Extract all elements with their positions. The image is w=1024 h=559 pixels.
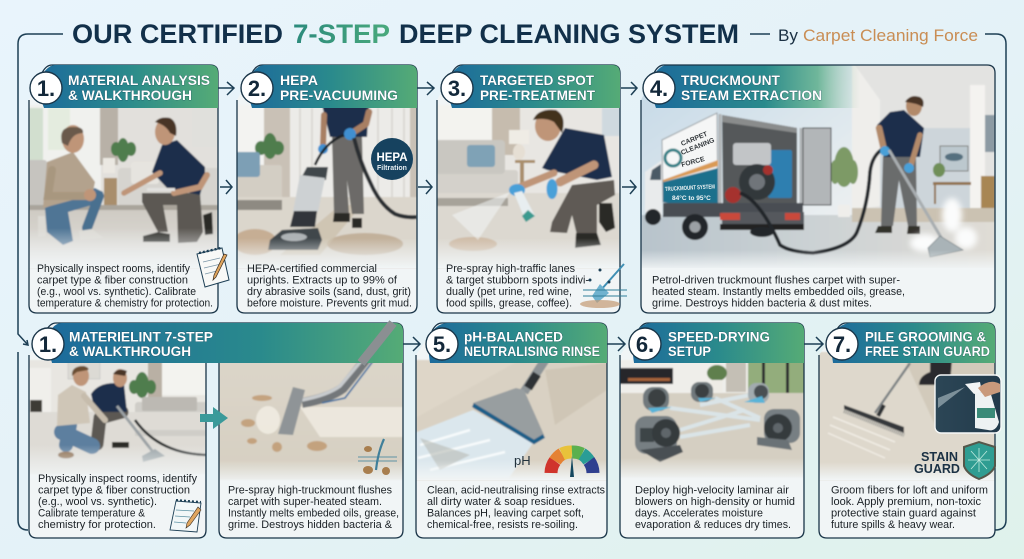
boot bbox=[919, 360, 952, 385]
panel: step 5 neutralising rinse bbox=[412, 323, 611, 538]
description right: Pre-spray high-truckmount flushes bbox=[228, 484, 392, 496]
description left bbox=[38, 473, 197, 531]
icon: notepad bbox=[170, 500, 201, 532]
number 4: 4. bbox=[650, 76, 668, 101]
spray mist bbox=[452, 192, 510, 240]
stain guard label bbox=[914, 449, 960, 476]
arrows between steps 2 and 3 bbox=[417, 82, 434, 194]
heading bbox=[69, 328, 213, 359]
description left: Physically inspect rooms, identify bbox=[38, 473, 197, 485]
panel: step 6 speed drying bbox=[616, 323, 808, 538]
truck lettering: FORCE bbox=[681, 156, 706, 169]
description bbox=[446, 263, 589, 310]
heading: HEPA bbox=[280, 72, 318, 88]
person: technician bbox=[875, 96, 924, 234]
inset: spray bottle bbox=[935, 375, 1001, 433]
number 1 bbox=[32, 328, 64, 360]
truck lettering: TRUCKMOUNT SYSTEM bbox=[665, 184, 715, 193]
heading bbox=[865, 328, 990, 359]
byline: Carpet Cleaning Force bbox=[803, 26, 978, 45]
plant bbox=[830, 147, 858, 187]
heading bbox=[464, 328, 600, 359]
room bbox=[856, 66, 994, 208]
description: Petrol-driven truckmount flushes carpet with super- bbox=[652, 274, 900, 286]
title: 7-STEP bbox=[293, 19, 390, 49]
person: technician torso and legs bbox=[318, 105, 369, 228]
description: Groom fibers for loft and uniform bbox=[831, 484, 988, 496]
heading bbox=[280, 72, 398, 103]
arrow into step 7 bbox=[804, 337, 823, 351]
heading: PRE-VACUUMING bbox=[280, 87, 398, 103]
description: carpet type & fiber construction bbox=[37, 274, 188, 286]
description: heated steam. Instantly melts embedded oils, grease, bbox=[652, 286, 905, 298]
truck lettering: CLEANING bbox=[680, 137, 716, 157]
heading: TARGETED SPOT bbox=[480, 72, 594, 88]
panel: step 2 HEPA bbox=[233, 65, 421, 313]
number 4 bbox=[643, 72, 675, 104]
number 7 bbox=[826, 328, 858, 360]
description: (e.g., wool vs. synthetic). Calibrate bbox=[37, 286, 196, 298]
stain bbox=[327, 233, 403, 255]
description: Balances pH, leaving carpet soft, bbox=[427, 508, 584, 520]
description: look. Apply premium, non-toxic bbox=[831, 496, 981, 508]
hose bbox=[135, 420, 210, 455]
heading bbox=[480, 72, 595, 103]
number 1 bbox=[30, 72, 62, 104]
HEPA badge: Filtration bbox=[377, 165, 407, 172]
description: dually (pet urine, red wine, bbox=[446, 286, 572, 298]
heading: & WALKTHROUGH bbox=[68, 87, 192, 103]
hose bbox=[354, 138, 417, 217]
stain guard label: GUARD bbox=[914, 461, 960, 476]
description: all dirty water & soap residues. bbox=[427, 496, 575, 508]
wand bbox=[117, 406, 153, 452]
description: future spills & heavy wear. bbox=[831, 519, 955, 531]
description bbox=[427, 484, 605, 531]
panel: step 4 truckmount bbox=[637, 61, 999, 313]
person: homeowner bbox=[38, 125, 104, 245]
icon: stain guard shield bbox=[964, 442, 995, 479]
gauge bbox=[551, 452, 593, 473]
description: food spills, grease, coffee). bbox=[446, 298, 572, 310]
description: protective stain guard against bbox=[831, 508, 977, 520]
arrows between steps 3 and 4 bbox=[621, 82, 637, 194]
wand bbox=[889, 150, 945, 244]
description: uprights. Extracts up to 99% of bbox=[247, 274, 398, 286]
heading bbox=[681, 72, 822, 103]
description: chemical-free, resists re-soiling. bbox=[427, 519, 578, 531]
heading bbox=[668, 328, 770, 359]
description bbox=[37, 263, 213, 310]
description: Pre-spray high-traffic lanes bbox=[446, 263, 575, 275]
description: blowers on high-density or humid bbox=[635, 496, 795, 508]
heading: pH-BALANCED bbox=[464, 328, 563, 344]
panel: step 7 grooming bbox=[815, 323, 1001, 538]
description bbox=[652, 274, 905, 310]
byline: By bbox=[778, 26, 798, 45]
right photo bbox=[215, 360, 407, 480]
number 3: 3. bbox=[448, 76, 466, 101]
arrow into step 6 bbox=[607, 337, 625, 351]
heading: SPEED-DRYING bbox=[668, 328, 770, 344]
description right: Instantly melts embeded oils, grease, bbox=[228, 508, 399, 520]
wand over header bbox=[361, 323, 393, 363]
description: evaporation & reduces dry times. bbox=[635, 519, 791, 531]
HEPA badge: HEPA bbox=[376, 152, 408, 164]
stain guard label: STAIN bbox=[921, 449, 958, 464]
description: before moisture. Prevents grit mud. bbox=[247, 298, 412, 310]
title bbox=[72, 19, 739, 49]
heading: SETUP bbox=[668, 343, 711, 359]
header 1 bbox=[36, 65, 218, 108]
description: Physically inspect rooms, identify bbox=[37, 263, 190, 275]
heading: PILE GROOMING & bbox=[865, 328, 986, 344]
water bbox=[412, 410, 533, 478]
heading: TRUCKMOUNT bbox=[681, 72, 780, 88]
number 7: 7. bbox=[833, 332, 851, 357]
description left: carpet type & fiber construction bbox=[38, 484, 190, 496]
person: homeowner bbox=[57, 366, 105, 458]
number 6: 6. bbox=[636, 332, 654, 357]
number 3 bbox=[441, 72, 473, 104]
floor bbox=[637, 215, 999, 270]
description bbox=[635, 484, 795, 531]
description: days. Accelerates moisture bbox=[635, 508, 763, 520]
heading: MATERIELINT 7-STEP bbox=[69, 328, 213, 344]
person: technician bbox=[124, 118, 213, 243]
pH label: pH bbox=[514, 453, 531, 468]
truck lettering: CARPET bbox=[680, 131, 709, 148]
HEPA badge bbox=[371, 138, 413, 180]
steam bbox=[910, 198, 977, 252]
panel: step 1 material analysis bbox=[25, 65, 229, 313]
number 5: 5. bbox=[433, 332, 451, 357]
heading: & WALKTHROUGH bbox=[69, 343, 191, 359]
person: technician spraying bbox=[509, 110, 615, 248]
description right bbox=[228, 484, 399, 531]
description left: (e.g., wool vs. synthetic). bbox=[38, 496, 157, 508]
truck bbox=[645, 113, 831, 240]
title: OUR CERTIFIED bbox=[72, 19, 283, 49]
truck lettering: 84°C to 95°C bbox=[672, 194, 711, 202]
left photo bbox=[30, 360, 206, 412]
heading: MATERIAL ANALYSIS bbox=[68, 72, 210, 88]
description right: carpet with super-heated steam. bbox=[228, 496, 382, 508]
heading bbox=[68, 72, 210, 103]
icon: brush and sparkles bbox=[580, 264, 627, 308]
number 2: 2. bbox=[248, 76, 266, 101]
description: temperature & chemistry for protection. bbox=[37, 298, 213, 310]
truck lettering bbox=[665, 131, 716, 202]
header 4 bbox=[648, 65, 860, 108]
number 2 bbox=[241, 72, 273, 104]
arrows between steps 1 and 2 bbox=[218, 82, 234, 194]
header shared bbox=[46, 323, 403, 363]
arrow into step 5 bbox=[403, 337, 420, 351]
panel: step 3 spot treatment bbox=[433, 65, 627, 313]
description: grime. Destroys hidden bacteria & dust mites. bbox=[652, 298, 872, 310]
icon: notepad bbox=[197, 248, 229, 287]
header 3 bbox=[445, 65, 620, 108]
number 5 bbox=[426, 328, 458, 360]
wand bbox=[524, 360, 545, 392]
header 2 bbox=[245, 65, 417, 108]
title: DEEP CLEANING SYSTEM bbox=[399, 19, 739, 49]
description: dry abrasive soils (sand, dust, grit) bbox=[247, 286, 411, 298]
description bbox=[831, 484, 988, 531]
number 6 bbox=[629, 328, 661, 360]
description left: chemistry for protection. bbox=[38, 519, 156, 531]
panel: bottom double step bbox=[25, 323, 407, 539]
description: Clean, acid-neutralising rinse extracts bbox=[427, 484, 605, 496]
header 5 bbox=[427, 323, 607, 363]
header 7 bbox=[830, 323, 995, 363]
number 1: 1. bbox=[39, 332, 57, 357]
heading: PRE-TREATMENT bbox=[480, 87, 595, 103]
arrow: teal bbox=[200, 407, 228, 429]
description left: Calibrate temperature & bbox=[38, 508, 145, 520]
description: HEPA-certified commercial bbox=[247, 263, 377, 275]
header 6 bbox=[631, 323, 804, 363]
description: Deploy high-velocity laminar air bbox=[635, 484, 789, 496]
person: technician bbox=[91, 369, 129, 448]
icon: carpet fibres bbox=[358, 439, 397, 475]
vacuum bbox=[268, 135, 344, 250]
description bbox=[247, 263, 412, 310]
hose bbox=[740, 148, 884, 253]
blowers bbox=[635, 382, 800, 462]
number 1: 1. bbox=[37, 76, 55, 101]
heading: STEAM EXTRACTION bbox=[681, 87, 822, 103]
description: & target stubborn spots indivi- bbox=[446, 274, 589, 286]
heading: NEUTRALISING RINSE bbox=[464, 343, 600, 359]
heading: FREE STAIN GUARD bbox=[865, 343, 990, 359]
description right: grime. Destroys hidden bacteria & bbox=[228, 519, 392, 531]
rake bbox=[875, 363, 910, 413]
